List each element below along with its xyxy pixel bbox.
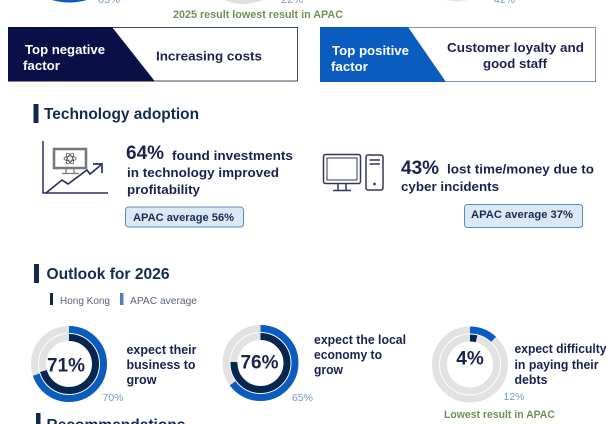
donut: business growth bbox=[34, 330, 124, 404]
section heading: recommendations bbox=[36, 413, 186, 424]
text: expect local economy to grow: economy to bbox=[314, 348, 382, 362]
donut: difficulty paying debts: 12% bbox=[504, 391, 524, 403]
panel: top positive factor: Customer loyalty and bbox=[447, 40, 584, 55]
panel: top negative factor: Top negative bbox=[25, 42, 105, 57]
panel: top positive factor: factor bbox=[331, 59, 368, 74]
panel: top negative factor: factor bbox=[23, 58, 60, 73]
stat: 64 percent technology: profitability bbox=[127, 183, 200, 197]
donut: business growth: 70% bbox=[102, 392, 124, 404]
legend bbox=[50, 293, 197, 307]
cropped top donut 3 bbox=[445, 0, 515, 6]
section heading: technology adoption: Technology adoption bbox=[44, 106, 199, 123]
stat: 64 percent technology: 64% bbox=[126, 143, 164, 164]
text: expect local economy to grow: expect the local bbox=[314, 333, 406, 347]
text: expect business to grow: expect their bbox=[126, 343, 197, 357]
panel: top positive factor: Top positive bbox=[332, 43, 409, 58]
stat: 43 percent cyber: cyber incidents bbox=[401, 180, 499, 194]
icon: desktop computer bbox=[324, 154, 383, 190]
callout: APAC average 56: APAC average 56% bbox=[133, 212, 234, 224]
text: expect local economy to grow: grow bbox=[314, 363, 343, 377]
text: expect difficulty paying debts: debts bbox=[514, 373, 548, 387]
donut: business growth: 71% bbox=[47, 356, 85, 376]
text: expect business to grow: business to bbox=[126, 358, 196, 372]
callout: APAC average 37 bbox=[464, 204, 582, 228]
legend: Hong Kong bbox=[60, 296, 110, 307]
text: expect business to grow: grow bbox=[126, 373, 157, 387]
text: expect local economy to grow bbox=[314, 333, 406, 377]
donut: local economy growth: 76% bbox=[240, 352, 279, 374]
callout: APAC average 56 bbox=[126, 207, 244, 227]
cropped top donut 1 bbox=[52, 0, 120, 6]
panel: top positive factor: good staff bbox=[483, 56, 548, 71]
donut: local economy growth bbox=[226, 328, 313, 404]
stat: 64 percent technology bbox=[126, 143, 293, 197]
section heading: outlook for 2026: Outlook for 2026 bbox=[46, 266, 170, 283]
panel: top negative factor bbox=[8, 27, 298, 82]
note: lowest result in APAC: Lowest result in APAC bbox=[444, 409, 555, 421]
stat: 43 percent cyber: 43% bbox=[401, 158, 439, 179]
panel: top positive factor bbox=[320, 27, 596, 82]
panel: top negative factor: Increasing costs bbox=[156, 48, 262, 64]
text: expect difficulty paying debts bbox=[514, 342, 606, 387]
callout: APAC average 37: APAC average 37% bbox=[471, 209, 573, 221]
stat: 43 percent cyber: lost time/money due to bbox=[447, 162, 594, 176]
icon: monitor with growth chart bbox=[43, 141, 108, 193]
donut: difficulty paying debts bbox=[436, 330, 524, 403]
note: lowest result: 2025 result lowest result in APAC bbox=[173, 9, 343, 21]
donut: difficulty paying debts: 4% bbox=[456, 348, 484, 370]
cropped top donut 2 bbox=[224, 0, 303, 6]
text: expect business to grow bbox=[126, 343, 197, 387]
stat: 43 percent cyber bbox=[401, 158, 594, 194]
stat: 64 percent technology: in technology improved bbox=[127, 166, 279, 180]
text: expect difficulty paying debts: in paying their bbox=[514, 358, 599, 372]
donut: local economy growth: 65% bbox=[292, 392, 313, 404]
legend: APAC average bbox=[130, 296, 197, 307]
stat: 64 percent technology: found investments bbox=[172, 149, 293, 163]
